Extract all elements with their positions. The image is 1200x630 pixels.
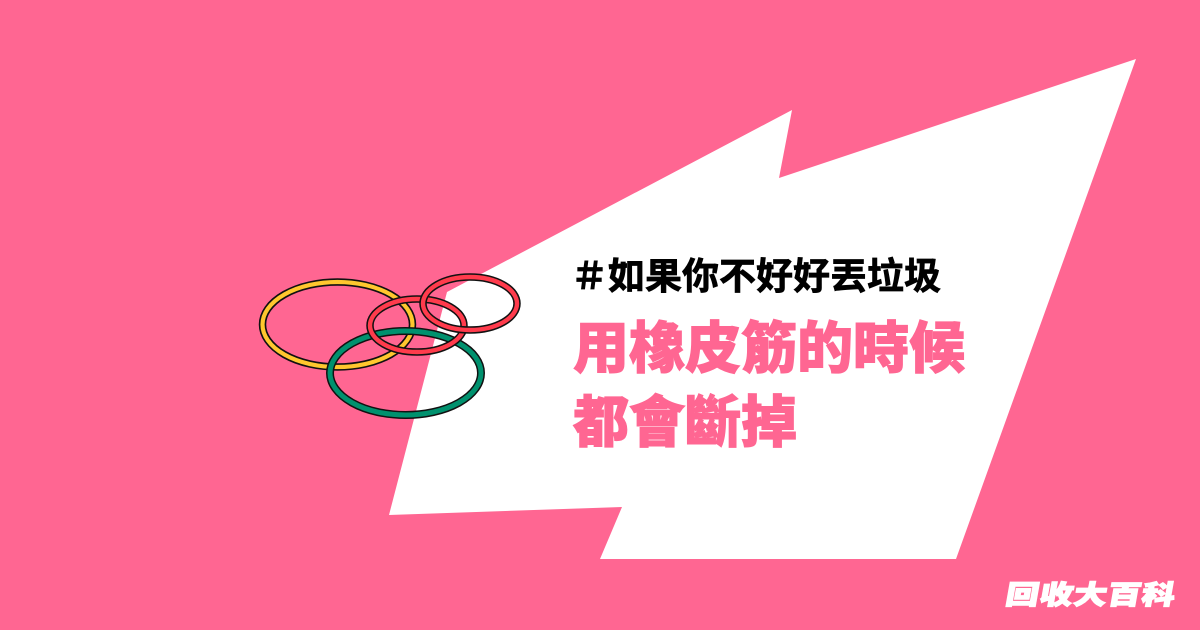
green rubber band [330, 331, 481, 415]
title: 用橡皮筋的時候 [573, 317, 965, 380]
red rubber band, top right [423, 277, 517, 330]
title: 都會斷掉 [573, 391, 797, 454]
logo: 回收大百科 [1003, 580, 1179, 609]
title [572, 317, 966, 454]
yellow rubber band [262, 282, 412, 367]
red rubber band, middle [370, 299, 464, 352]
subtitle: ＃如果你不好好丟垃圾 [571, 256, 941, 297]
